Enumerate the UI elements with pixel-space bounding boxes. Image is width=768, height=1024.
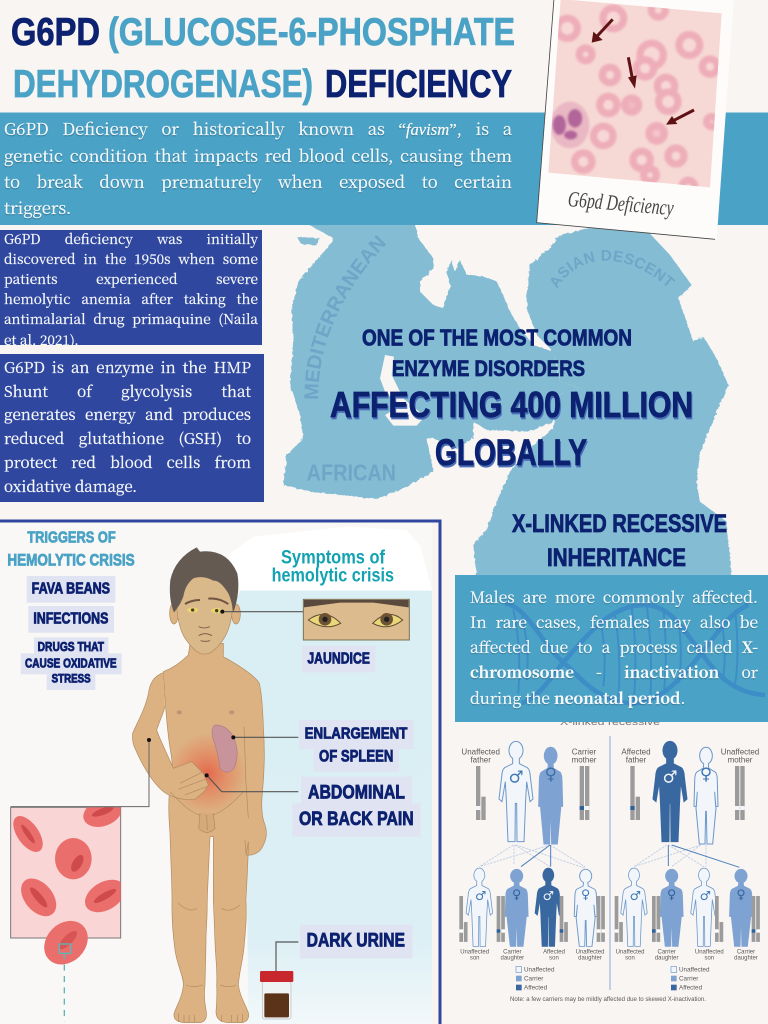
sex symbols: ♂ bbox=[509, 768, 523, 787]
heading: X-linked recessive inheritance: INHERITANCE bbox=[547, 544, 686, 572]
panel: inheritance explanation: during the neonatal period. bbox=[470, 687, 686, 709]
abdominal glow bbox=[168, 733, 247, 813]
leader lines bbox=[207, 612, 303, 972]
panel frame bbox=[0, 521, 440, 1024]
child labels: Carrier bbox=[503, 949, 521, 955]
symptom labels: JAUNDICE bbox=[307, 650, 370, 667]
title: G6PD bbox=[11, 11, 100, 54]
sex symbols: ♂ bbox=[663, 768, 677, 787]
panel: enzyme function: oxidative damage. bbox=[4, 476, 137, 497]
panel: discovery history: discovered in the 1950s when some bbox=[4, 248, 258, 268]
legend bbox=[516, 967, 710, 992]
symptom labels bbox=[299, 650, 414, 952]
legend: Carrier bbox=[679, 976, 698, 983]
label backgrounds bbox=[21, 576, 421, 958]
sex symbols: ♀ bbox=[581, 886, 590, 901]
spleen bbox=[212, 725, 237, 772]
intro paragraph: genetic condition that impacts red blood cells, causing them bbox=[4, 143, 512, 167]
map headline: 400 million: AFFECTING 400 MILLION bbox=[330, 384, 693, 425]
child labels bbox=[460, 949, 758, 961]
sex symbols: ♀ bbox=[512, 886, 521, 901]
polaroid: blood smear photo bbox=[537, 0, 734, 239]
parent labels: Affected bbox=[621, 748, 651, 757]
panel: inheritance explanation: Males are more commonly affected. bbox=[470, 586, 758, 608]
parent labels: Unaffected bbox=[721, 748, 759, 757]
panel: enzyme function: generates energy and produces bbox=[4, 404, 251, 425]
intro paragraph: G6PD Deficiency or historically known as “favism”, is a bbox=[4, 116, 512, 140]
polaroid caption: G6pd Deficiency bbox=[567, 186, 675, 220]
child labels: Unaffected bbox=[460, 949, 489, 955]
intro paragraph bbox=[4, 116, 512, 220]
child labels: daughter bbox=[501, 955, 524, 961]
family figures bbox=[466, 741, 752, 946]
parent labels bbox=[461, 748, 759, 765]
trigger labels: STRESS bbox=[52, 672, 91, 686]
panel: inheritance explanation: chromosome - inactivation or bbox=[470, 661, 758, 683]
child labels: daughter bbox=[655, 955, 678, 961]
panel: enzyme function: protect red blood cells from bbox=[4, 452, 251, 473]
child labels: Unaffected bbox=[616, 949, 644, 955]
title bbox=[11, 11, 515, 106]
child labels: son bbox=[705, 955, 714, 961]
symptoms background bbox=[220, 527, 432, 591]
child labels: Affected bbox=[543, 949, 565, 955]
sex symbols: ♀ bbox=[545, 764, 557, 783]
map headline: 400 million bbox=[330, 324, 693, 473]
trigger labels: INFECTIONS bbox=[33, 611, 108, 628]
title: DEHYDROGENASE) bbox=[13, 63, 313, 106]
sex symbols: ♂ bbox=[543, 888, 554, 903]
sex symbols: ♀ bbox=[667, 886, 676, 901]
sex symbols: ♀ bbox=[700, 764, 712, 783]
heading: X-linked recessive inheritance bbox=[512, 510, 727, 572]
map headline: 400 million: GLOBALLY bbox=[435, 432, 587, 473]
parent labels: father bbox=[470, 756, 491, 765]
triggers heading: TRIGGERS OF bbox=[27, 530, 116, 547]
legend: Affected bbox=[679, 985, 703, 992]
parent labels: mother bbox=[572, 756, 597, 765]
child labels: Carrier bbox=[658, 949, 676, 955]
child labels: son bbox=[549, 955, 559, 961]
symptom labels: OR BACK PAIN bbox=[299, 809, 414, 830]
parent labels: Unaffected bbox=[461, 748, 500, 757]
urine cup bbox=[260, 971, 293, 1019]
child figure bbox=[132, 570, 266, 1023]
sex symbols: ♀ bbox=[736, 886, 746, 901]
child labels: son bbox=[625, 955, 635, 961]
inheritance arrows bbox=[479, 845, 706, 868]
icon: DNA helix watermark bbox=[504, 601, 765, 706]
jaundice eyes inset bbox=[303, 599, 409, 640]
panel: enzyme function bbox=[0, 354, 264, 502]
child labels: Unaffected bbox=[576, 949, 604, 955]
panel: enzyme function: G6PD is an enzyme in the HMP bbox=[4, 357, 251, 378]
panel: inheritance explanation: affected due to a process called X- bbox=[470, 636, 758, 658]
panel: discovery history: antimalarial drug primaquine (Naila bbox=[4, 308, 258, 328]
map headline: 400 million: ENZYME DISORDERS bbox=[392, 356, 585, 381]
legend: Affected bbox=[524, 985, 548, 992]
title: (GLUCOSE-6-PHOSPHATE bbox=[108, 11, 515, 54]
sex symbols: ♂ bbox=[630, 888, 641, 903]
footnote: Note: a few carriers may be mildly affected due to skewed X-inactivation. bbox=[510, 997, 706, 1003]
trigger labels bbox=[25, 580, 117, 686]
sex symbols bbox=[475, 764, 746, 903]
panel: enzyme function: reduced glutathione (GSH) to bbox=[4, 428, 251, 449]
map label: African: AFRICAN bbox=[307, 460, 396, 486]
parent labels: mother bbox=[728, 756, 753, 765]
symptoms heading bbox=[272, 547, 394, 587]
panel: inheritance explanation: In rare cases, females may also be bbox=[470, 611, 758, 633]
panel: enzyme function: Shunt of glycolysis that bbox=[4, 381, 251, 402]
red blood cell inset bbox=[10, 806, 122, 1022]
sex symbols: ♂ bbox=[475, 888, 486, 903]
map label: Asian descent: ASIAN DESCENT bbox=[550, 250, 676, 288]
panel: discovery history: hemolytic anemia after taking the bbox=[4, 288, 258, 308]
ears and head bbox=[170, 603, 178, 624]
hair bbox=[170, 547, 238, 613]
map label: Mediterranean: MEDITERRANEAN bbox=[304, 235, 386, 398]
legend: Unaffected bbox=[679, 967, 710, 974]
child labels: Unaffected bbox=[695, 949, 724, 955]
triggers heading bbox=[7, 530, 135, 569]
symptom labels: ABDOMINAL bbox=[308, 783, 405, 804]
trigger labels: CAUSE OXIDATIVE bbox=[25, 656, 117, 670]
cropped diagram caption: X-linked recessive bbox=[560, 717, 660, 727]
symptoms heading: hemolytic crisis bbox=[272, 566, 394, 587]
trigger labels: FAVA BEANS bbox=[32, 580, 110, 597]
intro paragraph: to break down prematurely when exposed to certain bbox=[4, 169, 512, 193]
pedigree diagram: X-linked inheritance bbox=[459, 736, 760, 1003]
triggers heading: HEMOLYTIC CRISIS bbox=[7, 550, 135, 569]
title: DEFICIENCY bbox=[325, 63, 512, 106]
panel: triggers and symptoms illustration bbox=[0, 521, 441, 1024]
sex symbols: ♂ bbox=[700, 888, 711, 903]
parent labels: father bbox=[626, 756, 647, 765]
trigger labels: DRUGS THAT bbox=[38, 640, 104, 654]
parent labels: Carrier bbox=[572, 748, 597, 757]
map headline: 400 million: ONE OF THE MOST COMMON bbox=[362, 324, 632, 350]
child labels: Carrier bbox=[737, 949, 755, 955]
legend: Carrier bbox=[524, 976, 543, 983]
symptom labels: OF SPLEEN bbox=[319, 746, 393, 765]
legend: Unaffected bbox=[524, 967, 555, 974]
symptoms heading: Symptoms of bbox=[281, 547, 385, 568]
child labels: daughter bbox=[578, 955, 602, 961]
intro paragraph: triggers. bbox=[4, 195, 71, 219]
panel: discovery history bbox=[0, 230, 262, 345]
world map: affected regions bbox=[282, 225, 732, 575]
face bbox=[185, 598, 228, 641]
panel: inheritance explanation bbox=[455, 575, 768, 722]
symptom labels: ENLARGEMENT bbox=[305, 725, 408, 742]
child labels: daughter bbox=[734, 955, 758, 961]
chromosomes bbox=[459, 766, 760, 942]
child labels: son bbox=[470, 955, 479, 961]
teal intro band bbox=[0, 112, 768, 225]
symptom labels: DARK URINE bbox=[307, 931, 405, 952]
panel: discovery history: patients experienced severe bbox=[4, 268, 258, 288]
